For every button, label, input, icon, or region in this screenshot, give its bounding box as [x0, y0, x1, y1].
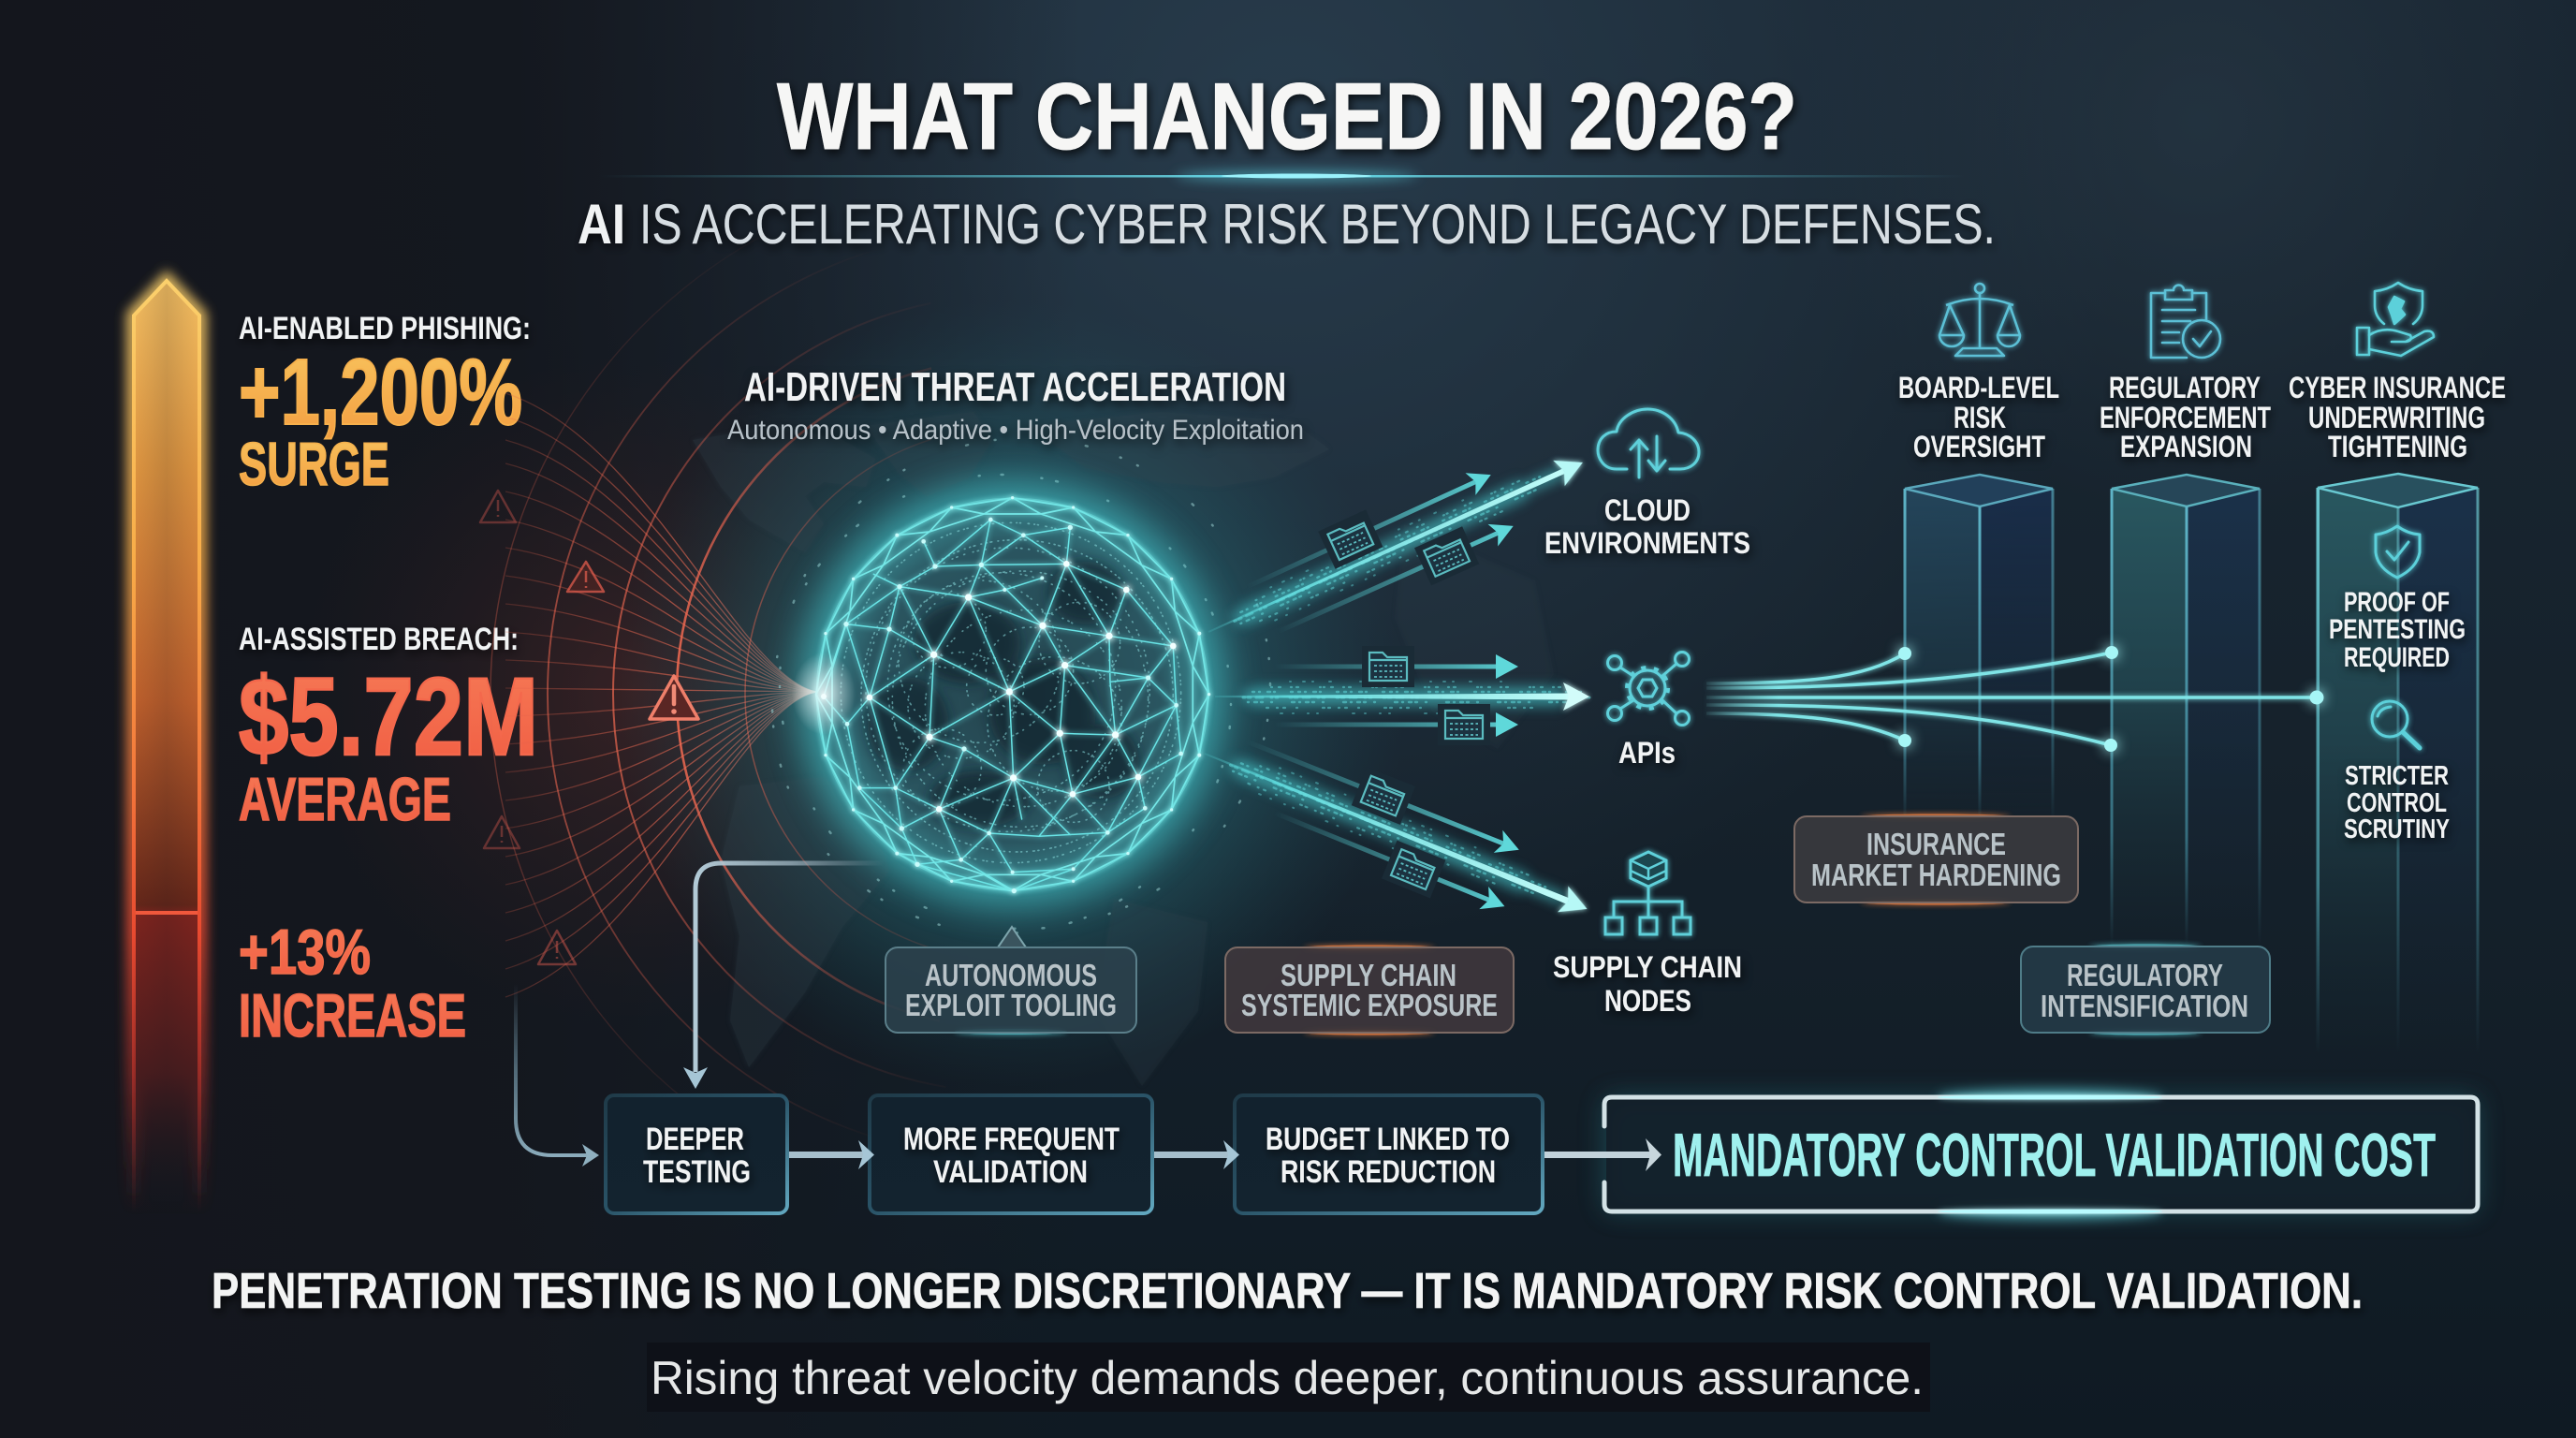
globe glow [800, 482, 1223, 905]
label: proof of pentesting required: REQUIRED [2344, 642, 2450, 673]
pillar: cyber insurance underwriting tightening [2316, 474, 2479, 1053]
stat: phishing [239, 311, 531, 498]
pillar: board-level risk oversight [1904, 475, 2054, 824]
globe impact flare [792, 653, 856, 735]
callout: regulatory intensification: REGULATORY [2067, 958, 2223, 992]
icon: faint warning triangle [538, 931, 576, 964]
threat thermometer arrow [134, 281, 199, 1212]
stat: phishing: AI-ENABLED PHISHING: [239, 311, 531, 346]
arrow: globe to deeper testing [683, 863, 885, 1089]
callout: insurance market hardening [1794, 814, 2078, 904]
stat: phishing: +1,200% [239, 340, 522, 445]
icon: API gear [1608, 652, 1689, 725]
icon: cloud [1598, 409, 1699, 477]
stat: increase [239, 917, 466, 1049]
heading: threat acceleration [727, 364, 1304, 446]
flow box: deeper testing: TESTING [643, 1154, 751, 1190]
glowing network globe [816, 496, 1210, 893]
callout: autonomous exploit tooling: EXPLOIT TOOLING [905, 988, 1117, 1022]
stat: breach cost: $5.72M [239, 655, 538, 779]
stat: breach cost [239, 622, 538, 833]
data arrow with folder: cloud upper [1238, 456, 1500, 606]
label: stricter control scrutiny [2344, 761, 2450, 844]
red threat radar arcs [490, 172, 1533, 1215]
globe interior particles [841, 522, 1181, 863]
callout: autonomous exploit tooling: AUTONOMOUS [925, 958, 1097, 992]
globe mesh lines [824, 520, 1181, 891]
globe primary nodes [867, 561, 1177, 813]
flow box: budget linked to risk reduction [1235, 1095, 1543, 1213]
label: regulatory enforcement expansion: ENFORCEMENT [2100, 401, 2271, 434]
label: supply chain nodes: NODES [1604, 984, 1691, 1018]
data arrow with folder: cloud lower [1269, 507, 1522, 651]
label: regulatory enforcement expansion [2100, 371, 2271, 463]
icon: supply chain nodes [1605, 852, 1690, 934]
data arrow with folder: supply lower [1266, 794, 1513, 925]
data arrow with folder: supply upper [1239, 723, 1527, 869]
mandatory control validation cost box [1604, 1089, 2478, 1220]
red threat signal fan [505, 393, 816, 997]
icon: shield on hand [2357, 283, 2434, 356]
heading: threat acceleration: AI-DRIVEN THREAT ACCELERATION [744, 364, 1286, 410]
data arrow with folder: API lower [1274, 704, 1518, 745]
label: proof of pentesting required: PENTESTING [2329, 614, 2466, 645]
title: WHAT CHANGED IN 2026? [777, 65, 1797, 169]
label: stricter control scrutiny: STRICTER [2345, 761, 2449, 791]
callout: supply chain systemic exposure: SUPPLY CHAIN [1281, 958, 1456, 992]
flow box: more frequent validation: VALIDATION [933, 1154, 1088, 1190]
callout: regulatory intensification [2021, 944, 2270, 1035]
arrow: budget to mandatory cost [1544, 1138, 1661, 1171]
label: board-level risk oversight: RISK [1954, 401, 2006, 434]
icon: shield check [2376, 526, 2420, 578]
icon: warning triangle [567, 562, 604, 592]
flow nodes [1898, 646, 2323, 752]
flow box: more frequent validation: MORE FREQUENT [903, 1122, 1120, 1157]
globe dark patches [868, 562, 1139, 827]
callout: insurance market hardening: INSURANCE [1866, 827, 2006, 861]
icon: scales [1939, 284, 2020, 356]
label: board-level risk oversight: BOARD-LEVEL [1898, 371, 2059, 404]
callout: insurance market hardening: MARKET HARDENING [1811, 858, 2061, 892]
arrow: to supply chain nodes [1199, 741, 1592, 922]
flow box: more frequent validation [870, 1095, 1152, 1213]
callout: supply chain systemic exposure: SYSTEMIC EXPOSURE [1241, 988, 1498, 1022]
flow box: budget linked to risk reduction: BUDGET LINKED TO [1266, 1122, 1510, 1157]
label: supply chain nodes: SUPPLY CHAIN [1553, 950, 1742, 984]
stat: breach cost: AVERAGE [239, 765, 451, 833]
scattered particles around globe [772, 438, 1270, 933]
label: board-level risk oversight: OVERSIGHT [1913, 430, 2045, 463]
title divider [599, 170, 1966, 182]
flow box: deeper testing [606, 1095, 787, 1213]
label: stricter control scrutiny: CONTROL [2347, 788, 2447, 818]
subtitle: AI [578, 193, 625, 256]
callout: regulatory intensification: INTENSIFICATION [2041, 989, 2248, 1023]
callout: supply chain systemic exposure [1225, 946, 1514, 1035]
icon: magnifier [2372, 701, 2420, 748]
icon: faint warning triangle [480, 491, 516, 522]
flow box: budget linked to risk reduction: RISK REDUCTION [1281, 1154, 1496, 1190]
subtitle: IS ACCELERATING CYBER RISK BEYOND LEGACY DEFENSES. [639, 193, 1996, 256]
label: supply chain nodes [1553, 950, 1742, 1018]
arrow: thermometer to deeper testing [516, 983, 599, 1167]
icon: faint warning triangle [484, 816, 520, 848]
label: APIs: APIs [1618, 736, 1676, 770]
globe secondary nodes [821, 496, 1210, 893]
callout: autonomous exploit tooling [886, 927, 1136, 1034]
flow lines to pillars [1706, 653, 2317, 745]
particle streams [1224, 463, 1589, 910]
arrow: frequent to budget [1154, 1140, 1239, 1169]
caption with dark backdrop: Rising threat velocity demands deeper, continuous assurance. [651, 1352, 1924, 1404]
label: regulatory enforcement expansion: EXPANSION [2120, 430, 2252, 463]
stat: increase: INCREASE [239, 981, 466, 1049]
stat: phishing: SURGE [239, 430, 389, 498]
label: board-level risk oversight [1898, 371, 2059, 463]
pillar: regulatory enforcement expansion [2110, 475, 2261, 946]
label: stricter control scrutiny: SCRUTINY [2344, 814, 2450, 844]
label: proof of pentesting required [2329, 587, 2466, 673]
faint world map [693, 412, 1554, 1086]
label: cloud environments: CLOUD [1604, 493, 1690, 527]
arrow: to APIs [1215, 682, 1589, 711]
label: cyber insurance underwriting tightening: TIGHTENING [2328, 430, 2467, 463]
label: cyber insurance underwriting tightening: UNDERWRITING [2308, 401, 2485, 434]
label: cyber insurance underwriting tightening [2289, 371, 2506, 463]
arrow: deeper to frequent [789, 1140, 874, 1169]
data arrow with folder: API upper [1274, 646, 1518, 687]
label: regulatory enforcement expansion: REGULATORY [2109, 371, 2261, 404]
label: cloud environments: ENVIRONMENTS [1544, 526, 1750, 560]
label: cyber insurance underwriting tightening: CYBER INSURANCE [2289, 371, 2506, 404]
stat: breach cost: AI-ASSISTED BREACH: [239, 622, 519, 657]
label: proof of pentesting required: PROOF OF [2344, 587, 2450, 618]
stat: increase: +13% [239, 917, 371, 988]
icon: clipboard [2151, 286, 2220, 358]
arrow: to cloud environments [1203, 449, 1588, 645]
label: cloud environments [1544, 493, 1750, 560]
flow box: deeper testing: DEEPER [646, 1122, 744, 1157]
globe rim mesh [816, 498, 1209, 891]
heading: threat acceleration: Autonomous • Adaptive • High-Velocity Exploitation [727, 415, 1304, 446]
icon: main warning triangle [650, 676, 698, 719]
